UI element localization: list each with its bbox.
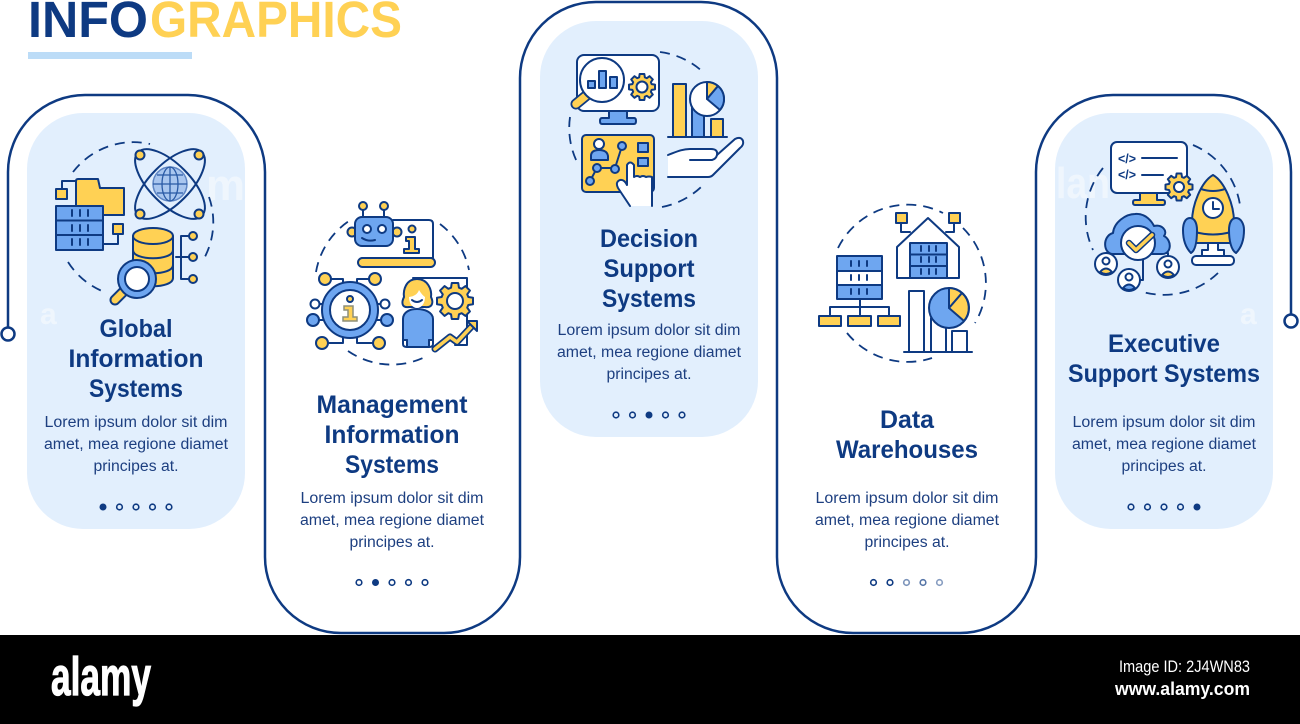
heading xyxy=(68,315,204,403)
icon: executive support systems xyxy=(1086,142,1244,295)
column: Executive Support Systems xyxy=(1068,142,1260,510)
body text: amet, mea regione diamet xyxy=(1072,436,1257,453)
heading: Decision xyxy=(600,225,698,253)
heading: Warehouses xyxy=(836,436,978,464)
heading: Support Systems xyxy=(1068,360,1260,388)
body text xyxy=(44,414,229,475)
icon: management information systems xyxy=(307,202,477,365)
heading: Systems xyxy=(345,451,439,479)
panel: highlight background column 5 xyxy=(1055,113,1273,529)
body text: principes at. xyxy=(864,534,950,551)
body text: principes at. xyxy=(1122,458,1206,475)
body text xyxy=(1072,414,1257,475)
icon: global information systems xyxy=(56,138,216,300)
body text: amet, mea regione diamet xyxy=(300,512,485,529)
heading xyxy=(600,225,698,313)
footer band xyxy=(0,635,1300,724)
body text xyxy=(557,322,742,383)
icon: executive support systems: </> xyxy=(1118,151,1136,166)
pagination dots xyxy=(871,580,942,585)
column: Global Information Systems xyxy=(44,138,229,510)
watermark fragments: m xyxy=(206,161,245,210)
pagination dots xyxy=(100,504,172,510)
watermark fragments: a xyxy=(40,298,57,331)
heading: Data xyxy=(880,406,935,434)
watermark fragments: a xyxy=(1240,298,1257,331)
heading: Support xyxy=(604,255,695,283)
body text: principes at. xyxy=(94,458,178,475)
heading: Global xyxy=(100,315,172,343)
footer logo: alamy xyxy=(51,647,151,707)
column: Data Warehouses xyxy=(815,205,1000,585)
heading: Information xyxy=(68,345,204,373)
heading xyxy=(836,406,978,464)
body text: Lorem ipsum dolor sit dim xyxy=(300,490,484,507)
body text: amet, mea regione diamet xyxy=(44,436,229,453)
body text: amet, mea regione diamet xyxy=(557,344,742,361)
column: Decision Support Systems xyxy=(557,52,743,418)
watermark fragments xyxy=(40,159,1257,331)
heading: Executive xyxy=(1108,330,1220,358)
body text: Lorem ipsum dolor sit dim xyxy=(816,490,998,507)
heading xyxy=(1068,330,1260,388)
panel: highlight background column 1 xyxy=(27,113,245,529)
title xyxy=(28,0,402,48)
pagination dots xyxy=(613,412,685,418)
icon: executive support systems: </> xyxy=(1118,167,1136,182)
watermark fragments: lan xyxy=(1056,159,1110,208)
title underline xyxy=(28,52,192,59)
body text: principes at. xyxy=(606,366,692,383)
body text xyxy=(300,490,485,551)
heading: Information xyxy=(324,421,460,449)
heading xyxy=(316,391,468,479)
footer url: www.alamy.com xyxy=(1114,679,1250,699)
pagination dots xyxy=(356,579,428,586)
pagination dots xyxy=(1128,504,1200,510)
footer image id: Image ID: 2J4WN83 xyxy=(1119,657,1250,676)
body text: Lorem ipsum dolor sit dim xyxy=(44,414,228,431)
body text: amet, mea regione diamet xyxy=(815,512,1000,529)
panel: highlight background column 3 xyxy=(540,21,758,437)
icon: decision support systems xyxy=(569,52,743,207)
icon: data warehouses xyxy=(819,205,986,362)
column: Management Information Systems xyxy=(300,202,485,586)
body text: principes at. xyxy=(350,534,434,551)
body text: Lorem ipsum dolor sit dim xyxy=(1072,414,1256,431)
heading: Systems xyxy=(602,285,696,313)
heading: Management xyxy=(316,391,468,419)
heading: Systems xyxy=(89,375,183,403)
body text: Lorem ipsum dolor sit dim xyxy=(558,322,740,339)
body text xyxy=(815,490,1000,551)
